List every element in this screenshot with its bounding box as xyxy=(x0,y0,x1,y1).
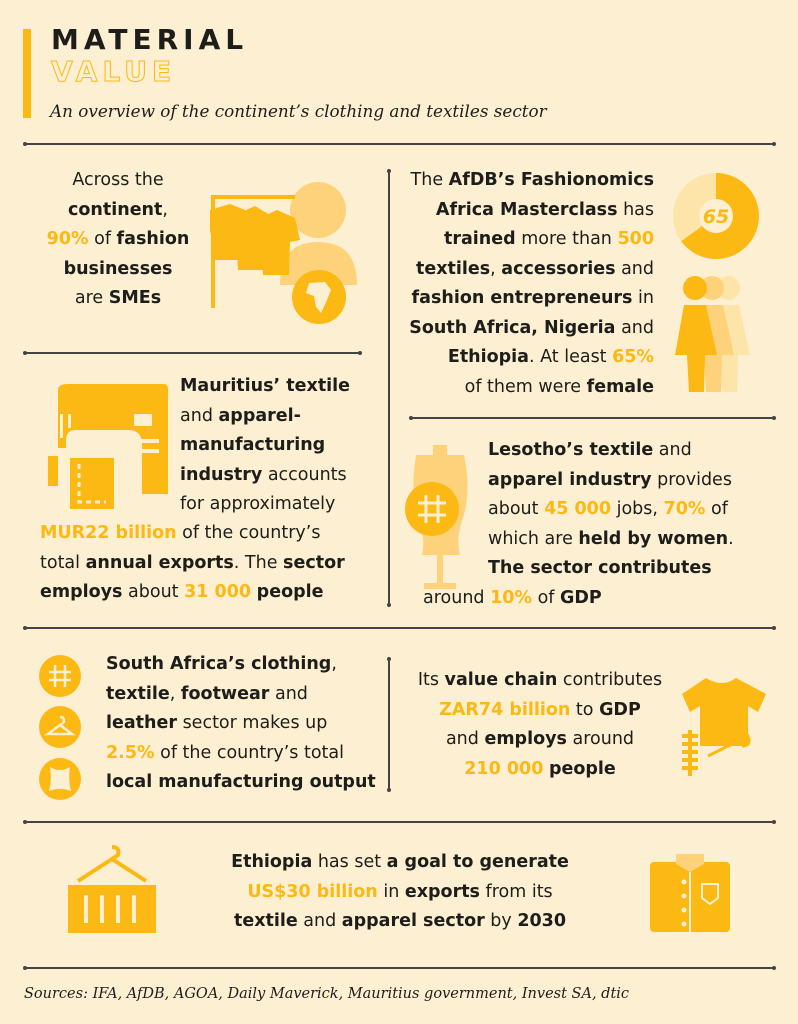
text: SMEs xyxy=(47,170,189,308)
text: SMEs: Across the xyxy=(72,170,164,190)
text: SMEs: are SMEs xyxy=(75,288,161,308)
text: SMEs: continent, xyxy=(68,200,168,220)
subtitle word VALUE outlined: VALUE xyxy=(51,55,176,88)
text: total annual exports. The sector xyxy=(40,552,345,572)
sources: Sources: IFA, AfDB, AGOA, Daily Maverick, Mauritius government, Invest SA, dtic xyxy=(24,986,629,1002)
text: value chain: and employs around xyxy=(446,729,634,749)
text: Fashionomics: Africa Masterclass has xyxy=(436,200,654,220)
icon: shipping container xyxy=(68,845,156,933)
text: value chain: Its value chain contributes xyxy=(418,670,662,690)
text: Lesotho xyxy=(488,440,734,578)
text: Lesotho: The sector contributes xyxy=(488,558,712,578)
text: SMEs: businesses xyxy=(64,258,172,278)
text: Mauritius: for approximately xyxy=(180,494,335,514)
text: Ethiopia: textile and apparel sector by 2030 xyxy=(234,911,566,931)
text: value chain: ZAR74 billion to GDP xyxy=(439,700,641,720)
text: Mauritius xyxy=(180,376,350,514)
text: around 10% of GDP xyxy=(423,588,602,608)
text: Ethiopia: US$30 billion in exports from its xyxy=(247,882,553,902)
text: employs about 31 000 people xyxy=(40,582,324,602)
icon: three women xyxy=(675,276,750,392)
icons: South Africa circles xyxy=(39,655,81,800)
text: South Africa: 2.5% of the country’s total xyxy=(106,742,344,762)
text: South Africa: textile, footwear and xyxy=(106,684,308,704)
text: Lesotho: apparel industry provides xyxy=(488,470,732,490)
icon: donut 65: 65 xyxy=(703,206,729,228)
icon: donut 65 xyxy=(673,173,759,259)
text: Fashionomics: Ethiopia. At least 65% xyxy=(448,347,654,367)
text: Fashionomics: trained more than 500 xyxy=(444,229,654,249)
title: MATERIAL xyxy=(51,23,248,56)
text: Lesotho: about 45 000 jobs, 70% of xyxy=(488,499,728,519)
text: MUR22 billion of the country’s xyxy=(40,523,320,543)
icon: clothes rack with person and Africa xyxy=(210,182,357,324)
text: Fashionomics: South Africa, Nigeria and xyxy=(409,318,654,338)
text: Lesotho: Lesotho’s textile and xyxy=(488,440,692,460)
text: value chain: 210 000 people xyxy=(464,758,616,778)
text: South Africa xyxy=(106,654,376,792)
text: Fashionomics: of them were female xyxy=(465,376,654,396)
text: South Africa: South Africa’s clothing, xyxy=(106,654,337,674)
text: Fashionomics: textiles, accessories and xyxy=(416,258,654,278)
text: value chain xyxy=(418,670,662,778)
text: Mauritius: and apparel- xyxy=(180,406,301,426)
icon: sewing machine xyxy=(48,384,168,509)
text: Ethiopia: Ethiopia has set a goal to generate xyxy=(231,852,569,872)
text: Mauritius: manufacturing xyxy=(180,435,325,455)
text: South Africa: local manufacturing output xyxy=(106,772,376,792)
text: Mauritius: industry accounts xyxy=(180,464,347,484)
text: SMEs: 90% of fashion xyxy=(47,229,189,249)
title accent bar xyxy=(23,29,31,118)
text: Fashionomics: fashion entrepreneurs in xyxy=(412,288,654,308)
subtitle: An overview of the continent’s clothing and textiles sector xyxy=(50,101,547,121)
icon: mannequin with button xyxy=(405,445,468,589)
text: Fashionomics xyxy=(409,170,654,396)
icon: shirt xyxy=(650,854,730,932)
text: Lesotho: which are held by women. xyxy=(488,528,734,548)
text: South Africa: leather sector makes up xyxy=(106,713,327,733)
text: Fashionomics: The AfDB’s Fashionomics xyxy=(411,170,654,190)
icon: t-shirt with hanger xyxy=(682,678,766,776)
text: Mauritius: Mauritius’ textile xyxy=(180,376,350,396)
text: Ethiopia xyxy=(231,852,569,931)
